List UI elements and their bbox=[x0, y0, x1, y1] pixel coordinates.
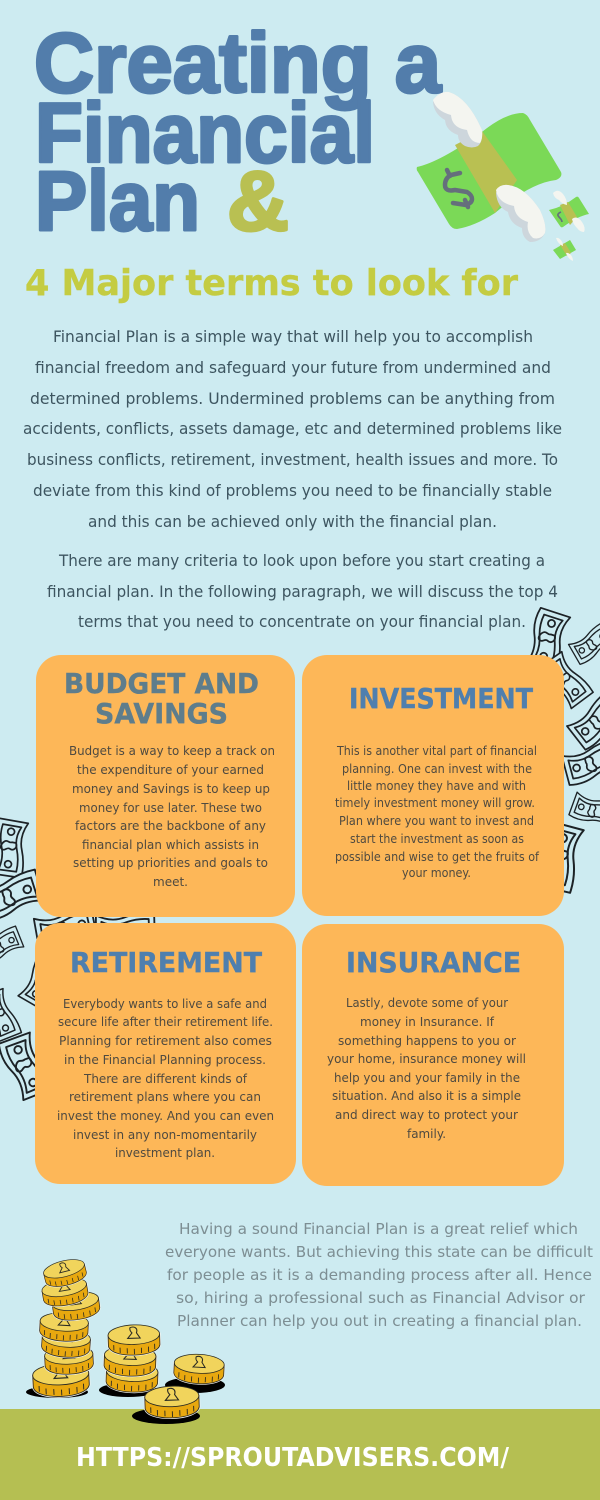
text: retirement: Everybody wants to live a safe and bbox=[63, 996, 267, 1011]
text: investment: your money. bbox=[402, 866, 471, 880]
text: investment: little money they have and with bbox=[347, 779, 526, 793]
text: insurance: money in Insurance. If bbox=[360, 1014, 495, 1029]
panel: budget and savings bbox=[36, 655, 295, 917]
intro paragraph: accidents, conflicts, assets damage, etc and determined problems like bbox=[23, 419, 562, 438]
text: budget and savings: money for use later. These two bbox=[79, 800, 262, 815]
text: budget and savings: financial plan which assists in bbox=[82, 837, 259, 852]
closing text: Having a sound Financial Plan is a great relief which bbox=[179, 1220, 578, 1238]
heading: budget and savings bbox=[64, 668, 259, 730]
closing text: for people as it is a demanding process after all. Hence bbox=[167, 1266, 592, 1284]
text: retirement bbox=[57, 996, 274, 1160]
text: retirement: Planning for retirement also comes bbox=[59, 1033, 272, 1048]
text: retirement: secure life after their retirement life. bbox=[58, 1014, 273, 1029]
second paragraph: terms that you need to concentrate on your financial plan. bbox=[78, 612, 526, 631]
intro paragraph bbox=[23, 327, 562, 531]
closing text bbox=[165, 1220, 593, 1330]
text: retirement: invest the money. And you can even bbox=[57, 1108, 274, 1123]
heading: retirement: RETIREMENT bbox=[70, 947, 262, 979]
text: investment: Plan where you want to invest and bbox=[339, 814, 534, 828]
text: budget and savings: Budget is a way to keep a track on bbox=[69, 743, 275, 758]
heading: budget and savings: SAVINGS bbox=[95, 698, 228, 730]
text: budget and savings: setting up priorities and goals to bbox=[73, 855, 268, 870]
text: insurance: situation. And also it is a simple bbox=[332, 1088, 521, 1103]
text: insurance bbox=[327, 995, 526, 1141]
panel: insurance bbox=[302, 924, 564, 1186]
icon: medium winged banknote bbox=[549, 191, 589, 232]
text: retirement: invest in any non-momentarily bbox=[73, 1127, 258, 1142]
icon: scattered banknotes right bbox=[522, 607, 600, 894]
text: retirement: There are different kinds of bbox=[83, 1071, 248, 1086]
text: insurance: something happens to you or bbox=[338, 1033, 517, 1048]
icon: scattered banknotes left bbox=[0, 818, 155, 1102]
second paragraph bbox=[47, 551, 558, 631]
title: Financial bbox=[35, 86, 375, 180]
second paragraph: financial plan. In the following paragraph, we will discuss the top 4 bbox=[47, 582, 558, 601]
title: & bbox=[227, 154, 289, 248]
text: retirement: retirement plans where you can bbox=[69, 1089, 261, 1104]
closing text: everyone wants. But achieving this state can be difficult bbox=[165, 1243, 593, 1261]
heading: investment: INVESTMENT bbox=[349, 683, 533, 715]
closing text: Planner can help you out in creating a financial plan. bbox=[177, 1312, 582, 1330]
subtitle: 4 Major terms to look for bbox=[25, 263, 518, 304]
text: investment: timely investment money will grow. bbox=[335, 796, 535, 810]
text: retirement: in the Financial Planning process. bbox=[64, 1052, 266, 1067]
text: investment: This is another vital part of financial bbox=[336, 744, 537, 758]
title bbox=[34, 16, 442, 248]
text: budget and savings: meet. bbox=[153, 874, 188, 889]
text: insurance: family. bbox=[407, 1126, 446, 1141]
footer band bbox=[0, 1409, 600, 1500]
panel: investment bbox=[302, 655, 564, 916]
text: budget and savings bbox=[69, 743, 275, 889]
text: budget and savings: factors are the backbone of any bbox=[75, 818, 267, 833]
text: insurance: help you and your family in the bbox=[334, 1070, 520, 1085]
intro paragraph: determined problems. Undermined problems can be anything from bbox=[30, 389, 555, 408]
heading: insurance: INSURANCE bbox=[346, 947, 521, 979]
footer url: HTTPS://SPROUTADVISERS.COM/ bbox=[76, 1443, 509, 1473]
text: investment: planning. One can invest with the bbox=[342, 762, 532, 776]
text: retirement: investment plan. bbox=[115, 1145, 215, 1160]
text: insurance: your home, insurance money will bbox=[327, 1051, 526, 1066]
heading: budget and savings: BUDGET AND bbox=[64, 668, 259, 700]
icon: flying money bbox=[417, 92, 589, 261]
panel: retirement bbox=[35, 923, 296, 1184]
text: insurance: and direct way to protect your bbox=[335, 1107, 519, 1122]
intro paragraph: deviate from this kind of problems you need to be financially stable bbox=[33, 481, 552, 500]
text: budget and savings: the expenditure of your earned bbox=[77, 762, 264, 777]
text: budget and savings: money and Savings is to keep up bbox=[72, 781, 270, 796]
intro paragraph: and this can be achieved only with the financial plan. bbox=[88, 512, 497, 531]
title: Creating a bbox=[34, 16, 442, 110]
intro paragraph: business conflicts, retirement, investment, health issues and more. To bbox=[27, 450, 558, 469]
second paragraph: There are many criteria to look upon before you start creating a bbox=[58, 551, 545, 570]
text: insurance: Lastly, devote some of your bbox=[346, 995, 509, 1010]
intro paragraph: Financial Plan is a simple way that will help you to accomplish bbox=[53, 327, 533, 346]
icon: large winged banknote bbox=[417, 92, 561, 242]
title: Plan bbox=[35, 154, 200, 248]
icon: small winged banknote bbox=[553, 238, 576, 261]
text: investment bbox=[335, 744, 540, 880]
text: investment: start the investment as soon as bbox=[350, 832, 524, 846]
icon: coin stacks bbox=[26, 1256, 225, 1424]
intro paragraph: financial freedom and safeguard your future from undermined and bbox=[35, 358, 551, 377]
text: investment: possible and wise to get the fruits of bbox=[335, 850, 540, 864]
closing text: so, hiring a professional such as Financial Advisor or bbox=[176, 1289, 586, 1307]
